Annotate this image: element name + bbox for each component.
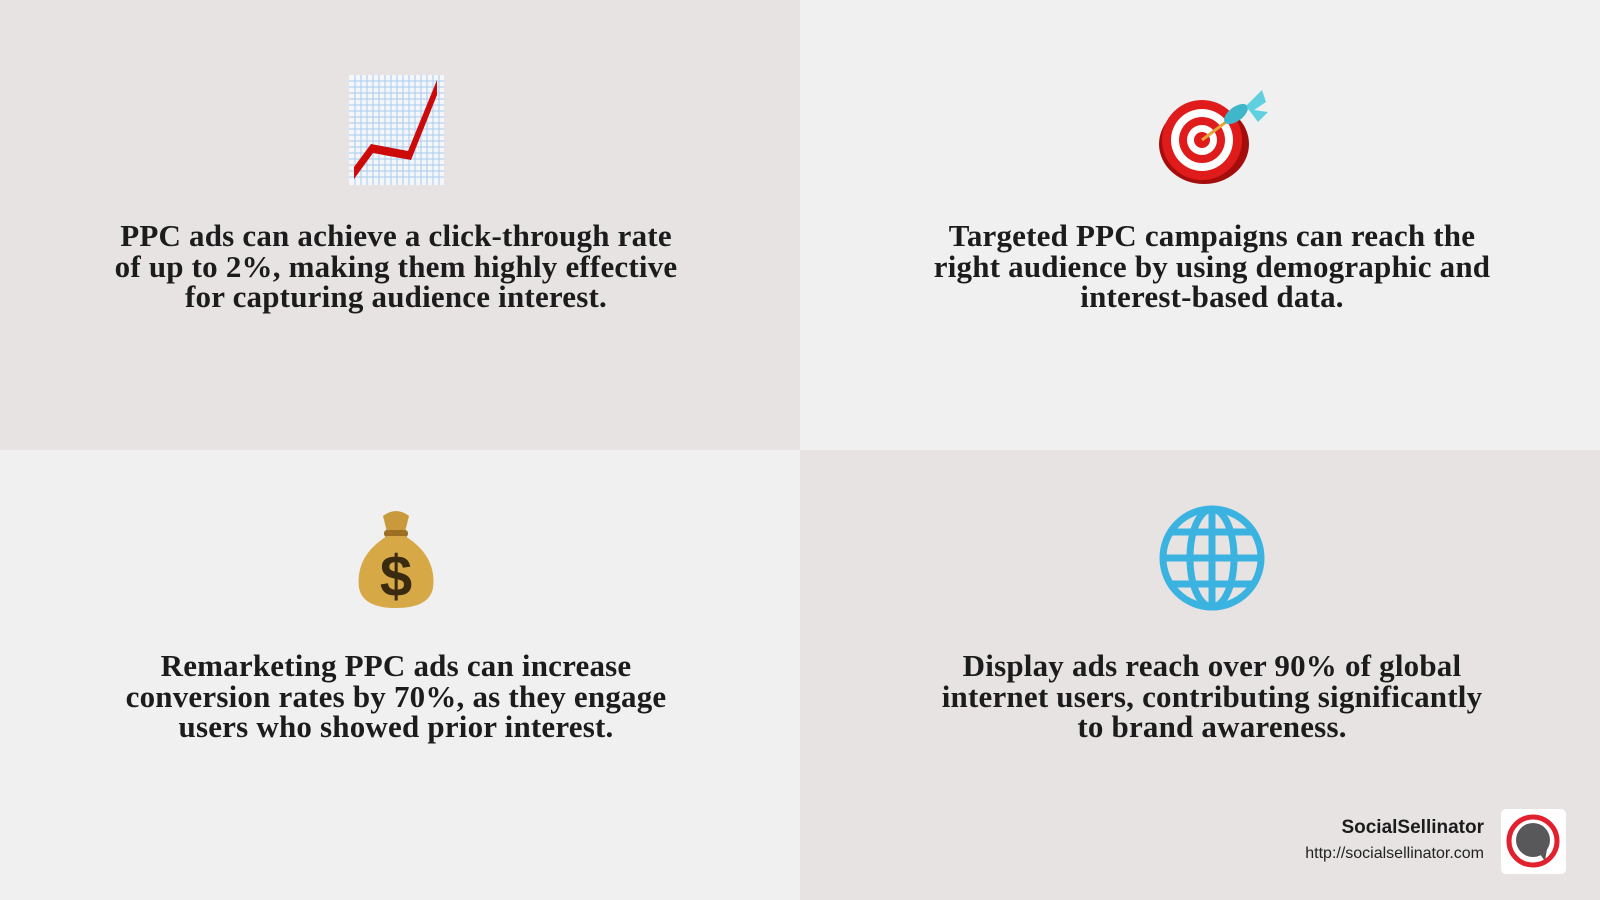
icon: money bag: $ [380, 544, 412, 609]
panel: remarketing [0, 450, 800, 900]
text: display: to brand awareness. [1077, 709, 1347, 744]
logo [1501, 809, 1566, 874]
text: ctr: PPC ads can achieve a click-through rate [120, 218, 672, 253]
text: display: internet users, contributing significantly [942, 678, 1482, 714]
text: ctr [115, 218, 677, 314]
text: targeting: right audience by using demographic and [934, 248, 1490, 284]
panel: targeting [800, 0, 1600, 450]
icon: chart increasing [349, 75, 444, 185]
text: targeting: Targeted PPC campaigns can reach the [949, 218, 1475, 253]
icon: target dart [1159, 90, 1268, 184]
text: display: Display ads reach over 90% of global [963, 648, 1461, 683]
panel: display ads [800, 450, 1600, 900]
text: remarketing: conversion rates by 70%, as they engage [126, 678, 666, 714]
brand name: SocialSellinator [1341, 817, 1484, 838]
text: targeting: interest-based data. [1080, 279, 1344, 314]
text: remarketing: Remarketing PPC ads can increase [161, 648, 631, 683]
text: remarketing: users who showed prior interest. [179, 709, 613, 744]
text: targeting [934, 218, 1490, 314]
panel: click-through rate [0, 0, 800, 450]
text: remarketing [126, 648, 666, 744]
brand footer [1305, 809, 1566, 874]
brand url: http://socialsellinator.com [1305, 845, 1484, 862]
text: display [942, 648, 1482, 744]
text: ctr: of up to 2%, making them highly effective [115, 248, 677, 284]
icon: globe [1160, 506, 1264, 610]
icon: money bag [358, 511, 434, 609]
text: ctr: for capturing audience interest. [185, 279, 607, 314]
